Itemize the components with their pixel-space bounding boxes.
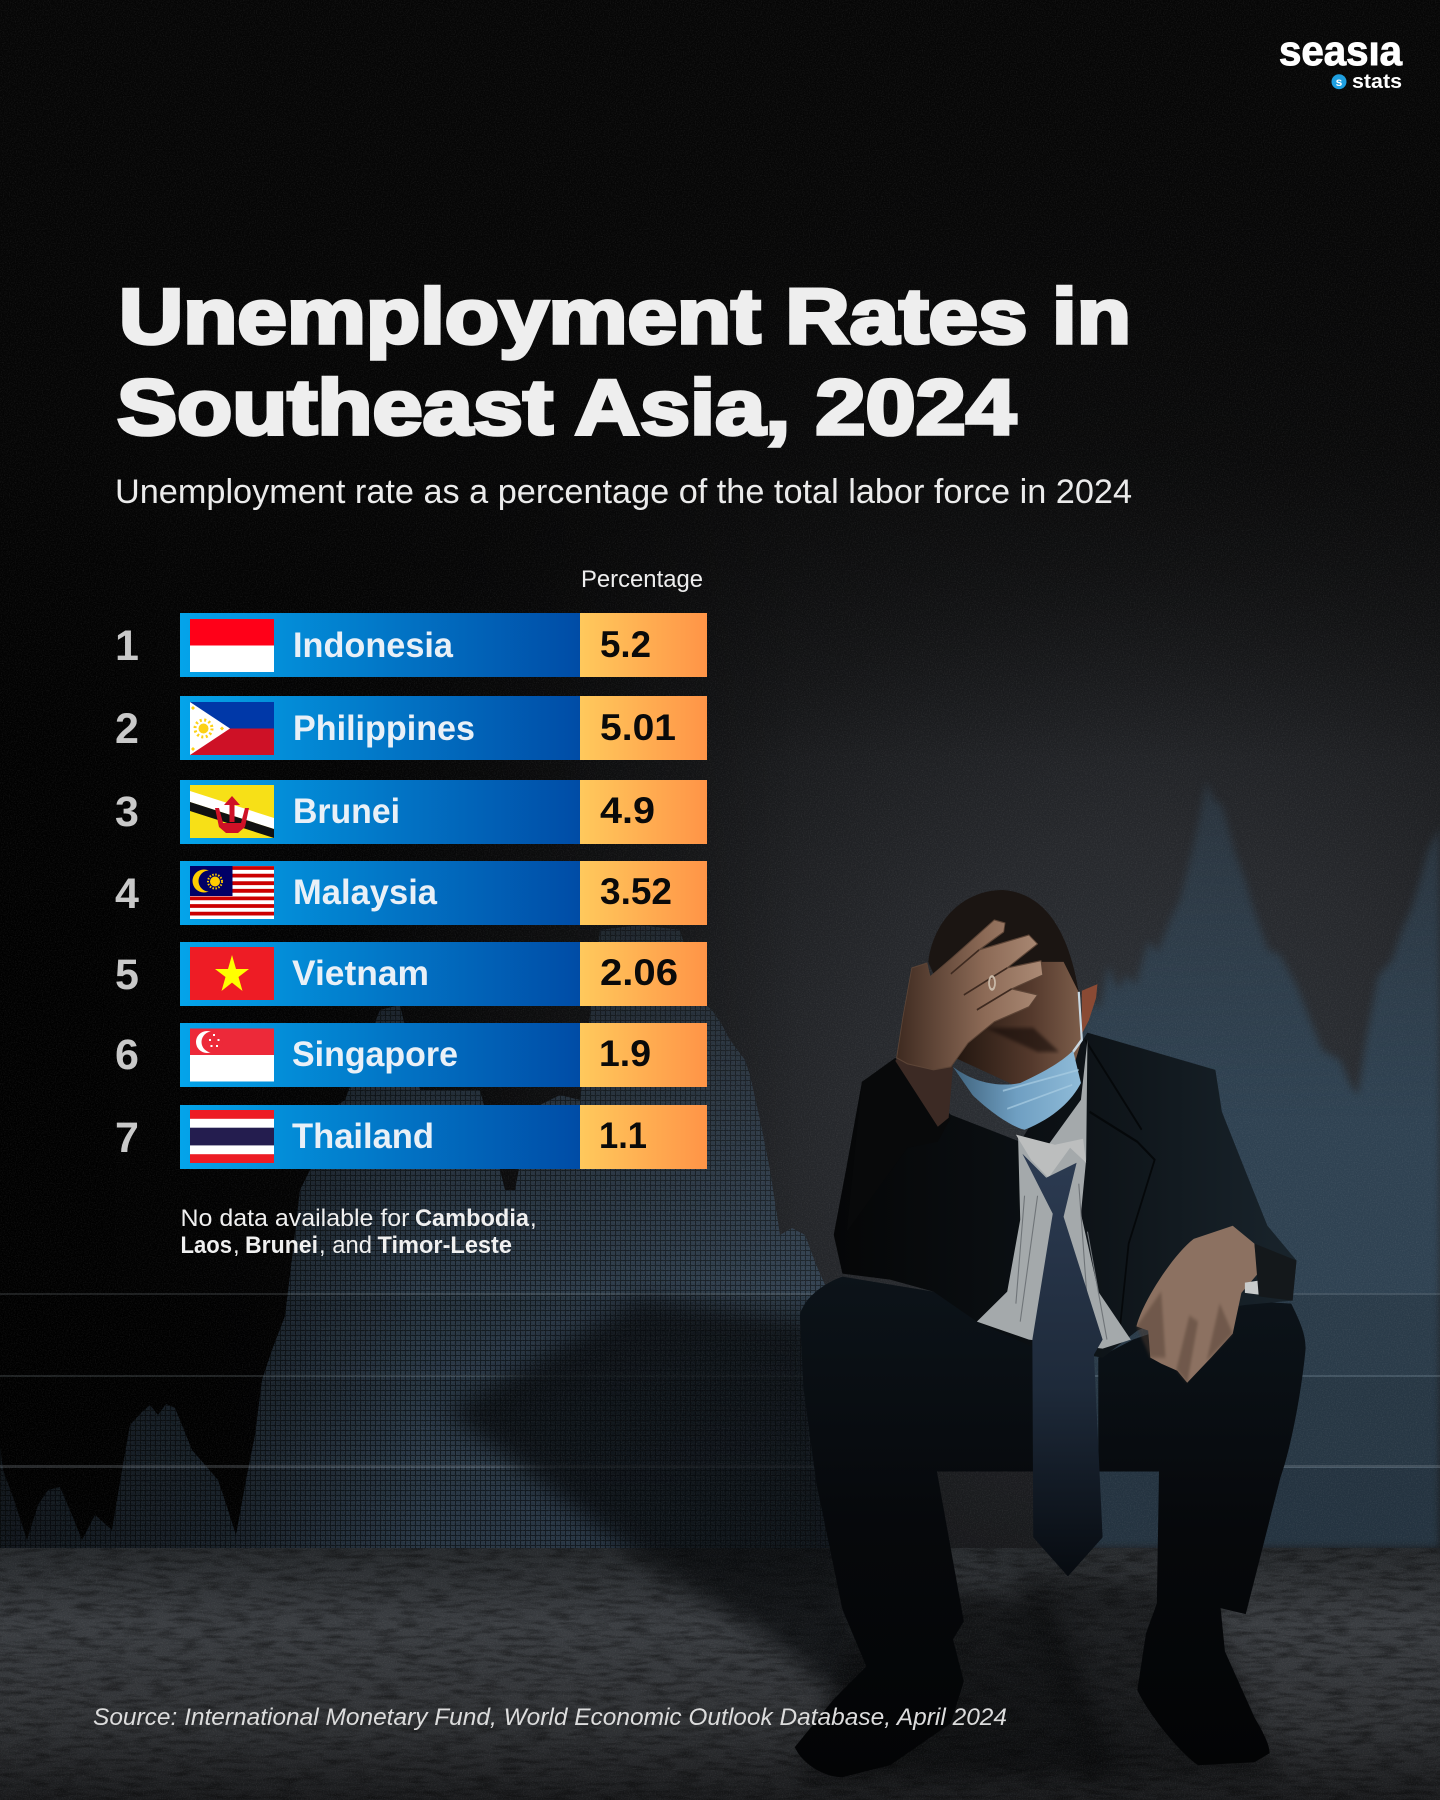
floor	[0, 1548, 1440, 1800]
footnote: no data: Timor-Leste	[378, 1232, 512, 1259]
shadow of man on wall and floor	[448, 1298, 1280, 1780]
row 1: Indonesia: 1	[115, 622, 139, 670]
man: mask pleat	[1003, 1070, 1079, 1109]
row 4: Malaysia: Malaysia	[293, 873, 438, 912]
source note: Source: International Monetary Fund, World Economic Outlook Database, April 2024	[93, 1704, 1007, 1731]
title	[117, 272, 1131, 451]
footnote: no data: ,	[233, 1232, 240, 1259]
title: Unemployment Rates in	[119, 272, 1131, 360]
row 4: Malaysia	[115, 861, 707, 925]
row 2: Philippines: 5.01	[600, 707, 676, 748]
panel: ranking table	[115, 613, 707, 1169]
man: shirt stripes	[1016, 1184, 1107, 1340]
man: ear	[1082, 984, 1097, 1034]
row 1: Indonesia: Indonesia	[293, 626, 454, 665]
man: jacket cuff	[1254, 1244, 1296, 1301]
man: hand shading	[1136, 1292, 1233, 1383]
row 7: Thailand: Thailand	[292, 1117, 434, 1156]
logo icon: s	[1336, 75, 1343, 89]
man: collar	[1016, 1135, 1086, 1178]
flag: Vietnam	[190, 947, 274, 1000]
man: tie	[1022, 1154, 1103, 1576]
left side darkness	[0, 0, 800, 1548]
man: face	[955, 962, 1082, 1088]
man: left leg and shoe	[795, 1277, 1033, 1777]
column header: Percentage: Percentage	[581, 566, 703, 593]
footnote: no data: , and	[319, 1232, 372, 1259]
flag: Indonesia	[190, 619, 274, 672]
row 5: Vietnam: 5	[115, 951, 139, 999]
man: raised hand	[897, 920, 1043, 1070]
flag: Malaysia	[190, 866, 274, 919]
man: ring	[989, 976, 995, 989]
man: wrist	[895, 1040, 953, 1127]
row 1: Indonesia: 5.2	[600, 624, 651, 665]
man: finger creases	[951, 950, 1012, 1010]
flag: Philippines	[190, 702, 274, 755]
row 1: Indonesia	[115, 613, 707, 677]
row 4: Malaysia: 3.52	[600, 871, 672, 912]
row 2: Philippines: Philippines	[293, 709, 475, 748]
man: eye shadow	[986, 1028, 1059, 1052]
logo wordmark: seasıa	[1279, 27, 1403, 74]
man: face mask	[953, 1051, 1081, 1130]
top darkness	[0, 0, 1440, 760]
footnote: no data: Laos	[180, 1232, 232, 1259]
row 3: Brunei	[115, 780, 707, 844]
man: hair	[928, 890, 1079, 992]
subtitle: Unemployment rate as a percentage of the total labor force in 2024	[115, 473, 1132, 511]
man: mask strap	[1073, 992, 1082, 1052]
man: jacket	[834, 1033, 1296, 1358]
row 2: Philippines	[115, 696, 707, 760]
row 6: Singapore: Singapore	[292, 1035, 458, 1074]
footnote: no data: Cambodia	[415, 1205, 530, 1232]
logo subtitle: stats	[1352, 71, 1402, 93]
footnote: no data	[180, 1205, 537, 1259]
chart: left market line area	[0, 925, 900, 1548]
footnote: no data: No data available for	[180, 1205, 410, 1232]
row 5: Vietnam: 2.06	[600, 952, 678, 993]
wall stair bands	[0, 1293, 1440, 1548]
flag: Thailand	[190, 1110, 274, 1163]
title: Southeast Asia, 2024	[117, 363, 1016, 451]
flag: Singapore	[190, 1028, 274, 1082]
flag: Brunei	[190, 785, 274, 838]
man: shirt cuff	[1245, 1280, 1265, 1295]
chart left fade	[0, 900, 420, 1548]
footnote: no data: ,	[530, 1205, 537, 1232]
row 2: Philippines: 2	[115, 705, 139, 753]
row 3: Brunei: 4.9	[600, 790, 655, 831]
man: lapel	[1085, 1040, 1155, 1328]
chart: right blurred market line	[1060, 781, 1440, 1548]
row 7: Thailand: 1.1	[599, 1115, 647, 1156]
row 4: Malaysia: 4	[115, 870, 139, 918]
row 3: Brunei: Brunei	[293, 792, 400, 831]
man: right leg and shoe	[1098, 1301, 1306, 1765]
row 7: Thailand: 7	[115, 1114, 139, 1162]
row 6: Singapore: 6	[115, 1031, 139, 1079]
row 5: Vietnam: Vietnam	[292, 954, 429, 993]
row 6: Singapore: 1.9	[599, 1033, 651, 1074]
row 3: Brunei: 3	[115, 788, 139, 836]
row 6: Singapore	[115, 1023, 707, 1087]
man: shirt	[977, 1040, 1131, 1349]
footnote: no data: Brunei	[245, 1232, 318, 1259]
row 5: Vietnam	[115, 942, 707, 1006]
logo: seasia stats	[1279, 27, 1403, 93]
row 7: Thailand	[115, 1105, 707, 1169]
illustration: man sitting with head in hand	[795, 890, 1306, 1777]
man: forearm sleeve	[847, 1058, 951, 1232]
man: resting hand	[1136, 1226, 1258, 1383]
